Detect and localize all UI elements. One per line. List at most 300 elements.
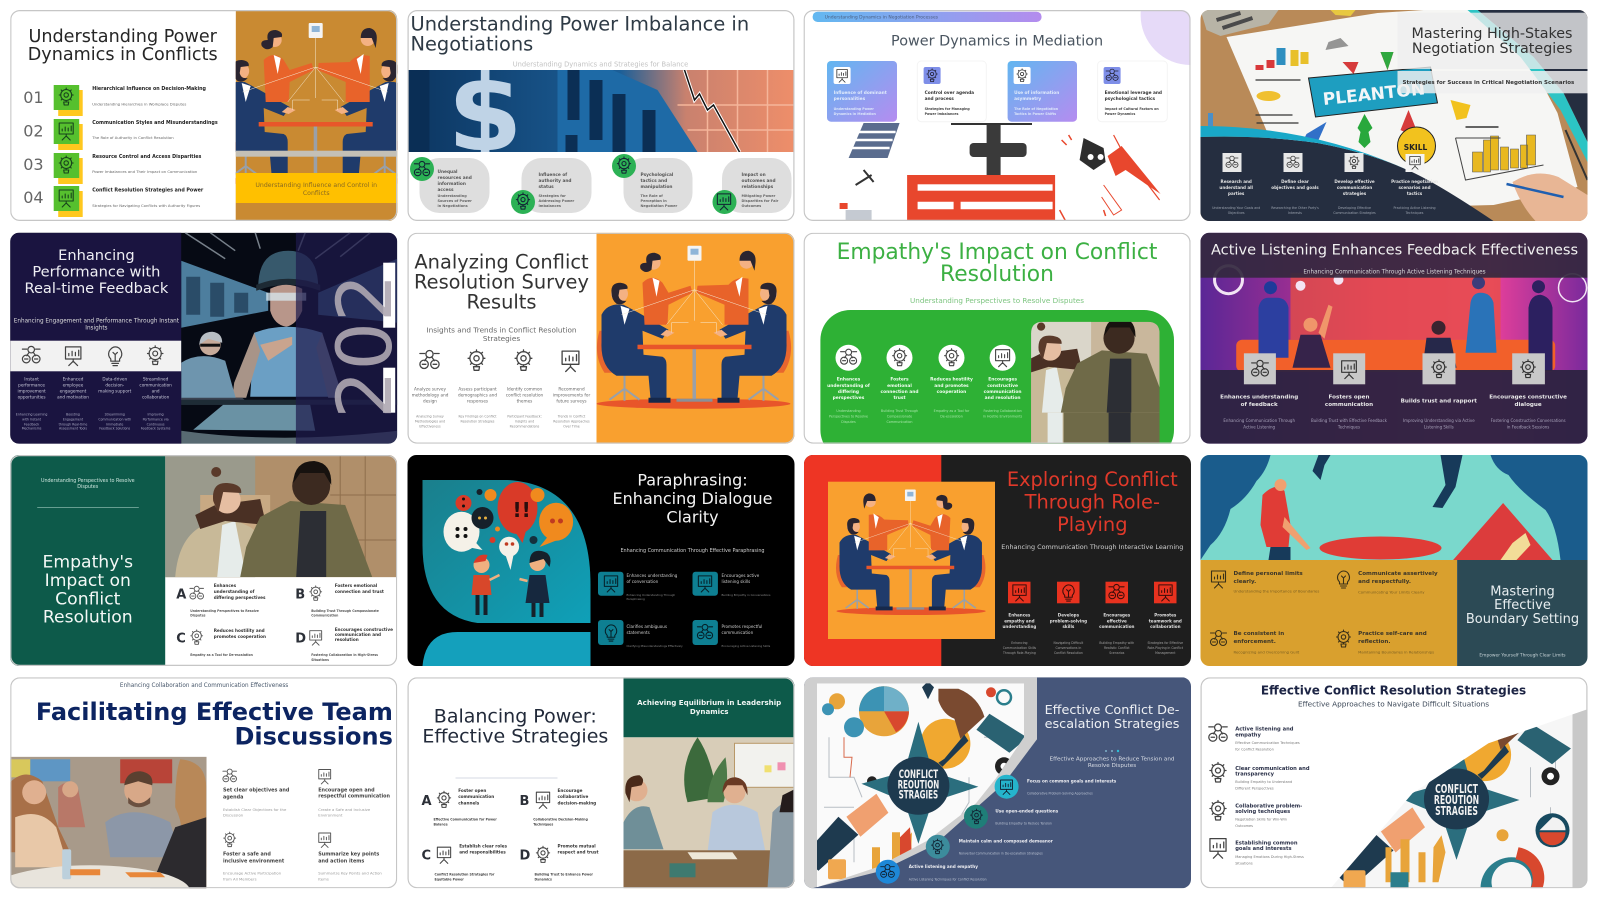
grid: four tips: listening skills <box>722 579 750 584</box>
text: benefits columns: Performance via <box>143 418 169 422</box>
header text: Achieving Equilibrium in Leadership <box>637 698 781 707</box>
text: survey columns: Assess participant <box>458 387 497 392</box>
grid: four tips: communication <box>722 630 754 635</box>
cards: four factors <box>410 154 792 214</box>
text: benefits columns: Encourages <box>988 377 1017 383</box>
illustration: camera on red stand <box>840 123 1161 221</box>
list: four strategies: Building Empathy to Understand <box>1235 780 1292 784</box>
subtitle: Insights <box>85 326 108 332</box>
list: numbered topics: Power Imbalances and Their Impact on Communication <box>92 169 198 174</box>
grid: A B C D: Empathy as a Tool for De-escalation <box>190 653 253 657</box>
grid: four tips: enforcement. <box>1234 639 1276 645</box>
panel: strategies on dark curve: Techniques <box>1405 211 1424 215</box>
cards: four dynamics: Impact of Cultural Factors on <box>1105 107 1159 111</box>
cards: four dynamics: and process <box>925 96 954 102</box>
compass label: STRAGIES <box>899 789 938 802</box>
text: benefits columns: opportunities <box>18 395 46 400</box>
illustration: conflict compass <box>802 681 1027 888</box>
decorative circle <box>1140 10 1190 65</box>
icons: red squares <box>1008 582 1176 603</box>
cards: four factors: manipulation <box>640 184 672 190</box>
panel: strategies on dark curve: Objectives <box>1228 211 1245 215</box>
grid: A B C D: Dynamics <box>534 877 552 881</box>
grid: A B C D: Situations <box>311 658 329 662</box>
cards: four dynamics: Understanding Power <box>834 107 874 111</box>
cards: four dynamics: Power Imbalances <box>925 112 958 116</box>
text: benefits columns: Compassionate <box>887 415 912 419</box>
text: benefits columns: and resolution <box>985 395 1021 401</box>
panel: green background <box>820 310 1174 460</box>
slide: Facilitating Effective Team Discussions <box>0 677 397 900</box>
cards: four dynamics: Tactics in Power Shifts <box>1014 112 1056 116</box>
grid: A B C D <box>422 788 598 881</box>
title: Through Role- <box>1024 490 1160 514</box>
panel: title band <box>1200 233 1588 278</box>
text: four outcomes: Management <box>1155 651 1176 655</box>
text: benefits columns: Feedback Solutions <box>99 427 131 431</box>
list: numbered topics: Hierarchical Influence on Decision-Making <box>92 86 207 92</box>
text: benefits columns: and promotes <box>934 383 969 389</box>
image: planning sketch on desk: SKILL <box>1404 143 1428 152</box>
text: benefits columns: differing <box>838 389 859 395</box>
text: four benefits: Fosters open <box>1329 395 1369 401</box>
image: helmet and control console <box>181 233 397 444</box>
text: benefits columns: Fosters <box>890 377 909 383</box>
title: Negotiations <box>410 32 533 56</box>
list: four strategies: Establishing common <box>1235 840 1298 846</box>
list: four strategies: Managing Emotions During High-Stress <box>1235 855 1304 859</box>
grid: four tips: Items <box>318 876 329 881</box>
text: four benefits: of feedback <box>1241 402 1278 408</box>
text: survey columns: improvements for <box>553 393 590 398</box>
text: four benefits: Listening Skills <box>1424 425 1454 430</box>
cards: four dynamics: asymmetry <box>1014 96 1041 102</box>
title: Active Listening Enhances Feedback Effectiveness <box>1211 242 1578 259</box>
grid: A B C D: Enhances <box>214 583 237 588</box>
cards: four factors: Negotiation Power <box>640 204 678 208</box>
panel: title background <box>1398 13 1588 93</box>
slide: Paraphrasing: Enhancing Dialogue Clarity <box>408 455 794 666</box>
grid: four tips: and action items <box>318 858 364 864</box>
list: four approaches: Focus on common goals and interests <box>1027 778 1117 783</box>
cards: four factors: Sources of Power <box>438 199 472 203</box>
text: survey columns: Identify common <box>507 387 543 392</box>
list: numbered topics: Understanding Hierarchies in Workplace Disputes <box>92 102 186 106</box>
image: boundary scene <box>1200 455 1588 560</box>
grid: A B C D: and responsibilities <box>459 850 506 855</box>
title: Understanding Power <box>28 27 218 47</box>
panel: strategies on dark curve: Define clear <box>1281 179 1309 184</box>
image: dollar and building <box>408 70 794 152</box>
cards: four factors: tactics and <box>640 178 667 184</box>
cards: four factors: Strategies for <box>538 194 566 198</box>
grid: A B C D: B <box>520 794 529 809</box>
illustration: speech bubbles and two children: !! <box>512 498 531 522</box>
subtitle: Understanding Dynamics and Strategies for Balance <box>513 60 688 68</box>
slide: Empathy's Impact on Conflict Resolution, green panel <box>804 233 1191 460</box>
text: survey columns: Analyze survey <box>414 387 446 392</box>
title: Real-time Feedback <box>24 280 169 297</box>
list: four approaches: Use open-ended questions <box>995 808 1059 813</box>
cards: four factors: Psychological <box>640 172 674 178</box>
title: Resolution Survey <box>414 271 589 294</box>
grid: A B C D: Effective Communication for Power <box>434 817 497 821</box>
text: benefits columns: Enhancing Learning <box>16 413 47 417</box>
text: benefits columns: Improving <box>148 413 164 417</box>
text: four outcomes: Role-Playing in Conflict <box>1148 646 1184 650</box>
slide: Balancing Power: Effective Strategies <box>408 677 794 888</box>
text: four outcomes: Promotes <box>1154 612 1177 618</box>
title: Effective Strategies <box>422 725 608 747</box>
text: four outcomes: Enhancing <box>1011 641 1028 645</box>
grid: four tips: Enhancing Understanding Through <box>626 593 675 597</box>
cards: four dynamics: The Role of Negotiation <box>1014 107 1059 111</box>
panel: strategies on dark curve: Practicing Active Listening <box>1393 206 1436 210</box>
text: four benefits: Techniques <box>1337 425 1360 430</box>
text: four benefits: Builds trust and rapport <box>1401 399 1477 405</box>
panel: strategies on dark curve: Researching the Other Party's <box>1271 206 1319 210</box>
text: four outcomes: Navigating Difficult <box>1054 641 1084 645</box>
text: four outcomes: problem-solving <box>1050 618 1087 623</box>
tagline: Understanding Perspectives to Resolve <box>41 478 135 484</box>
text: four benefits: Active Listening <box>1243 425 1276 430</box>
panel: icon band <box>10 341 181 371</box>
text: benefits columns: Fostering Collaboration <box>983 409 1022 413</box>
panel: meeting illustration: Understanding Influence and Control in <box>255 182 377 189</box>
text: benefits columns: making support <box>98 389 132 394</box>
text: benefits columns: Perspectives to Resolve <box>829 415 868 419</box>
grid: A B C D: Communication <box>311 614 338 618</box>
text: benefits columns: collaboration <box>142 395 170 400</box>
grid: A B C D: A <box>176 588 186 602</box>
grid: A B C D: Conflict Resolution Strategies for <box>434 872 495 876</box>
grid: A B C D: C <box>176 632 186 646</box>
text: benefits columns: Building Trust Through <box>881 409 918 413</box>
grid: A B C D: differing perspectives <box>214 595 266 600</box>
text: four benefits <box>1220 395 1567 430</box>
grid: four tips: Maintaining Boundaries in Relationships <box>1358 650 1434 654</box>
decoration: white bars and rotated year <box>334 262 396 414</box>
panel: meeting illustration <box>236 10 398 221</box>
list: four strategies: Situations <box>1235 861 1253 865</box>
cards: four factors: Outcomes <box>742 204 761 208</box>
image: people on a sofa <box>1200 233 1588 444</box>
title: Power Dynamics in Mediation <box>891 34 1103 50</box>
grid: four tips: Establish Clear Objectives for the <box>223 807 287 812</box>
text: benefits columns <box>827 377 1022 424</box>
icons: white circles <box>836 345 1016 371</box>
title: Empathy's <box>43 552 133 572</box>
panel: meeting illustration <box>596 233 794 444</box>
text: survey columns: Insights and <box>515 420 534 424</box>
title: Effective Conflict Resolution Strategies <box>1261 683 1526 697</box>
panel: yellow tips <box>1200 560 1457 666</box>
shape: lower teal panel <box>422 632 590 666</box>
photo: two people <box>165 455 397 577</box>
text: benefits columns: Continuous <box>147 423 165 427</box>
cards: four factors: Disparities for Fair <box>742 199 779 203</box>
list: four strategies: Different Perspectives <box>1235 786 1274 790</box>
text: benefits columns: Communication with <box>98 418 131 422</box>
text: survey columns <box>412 387 590 429</box>
header pill: Understanding Dynamics in Negotiation Processes <box>825 14 939 20</box>
slide: Understanding Power Dynamics in Conflicts <box>10 10 412 221</box>
grid: four tips: from All Members <box>223 876 257 881</box>
list: four approaches: Maintain calm and composed demeanor <box>959 838 1054 843</box>
text: benefits columns: Streamlined <box>143 377 169 382</box>
title: Empathy's Impact on Conflict <box>837 240 1158 265</box>
title: Dynamics in Conflicts <box>28 45 218 65</box>
compass label: CONFLICT <box>1435 782 1479 796</box>
panel: strategies on dark curve: understand all <box>1219 185 1254 190</box>
grid: A B C D: Encourages constructive <box>335 627 393 632</box>
list: four approaches: Collaborative Problem-Solving Approaches <box>1027 791 1093 795</box>
text: survey columns: Trends in Conflict <box>557 415 586 419</box>
text: four outcomes: Building Empathy with <box>1099 641 1134 645</box>
grid: A B C D: Promote mutual <box>558 843 596 848</box>
panel: meeting illustration: Conflicts <box>303 190 330 197</box>
title: Impact on <box>45 571 131 591</box>
text: four outcomes: Conflict Resolution <box>1054 651 1083 655</box>
text: benefits columns: De-escalation <box>940 415 963 419</box>
grid: four tips: Create a Safe and Inclusive <box>318 807 371 812</box>
cards: four factors: information <box>438 181 466 187</box>
list: four approaches: Active listening and empathy <box>909 864 978 869</box>
image: planning sketch on desk <box>1200 5 1588 221</box>
text: four outcomes: understanding <box>1002 624 1036 629</box>
text: benefits columns: Assessment Tools <box>59 427 87 431</box>
list: four strategies: Clear communication and <box>1235 766 1310 772</box>
grid: A B C D: promotes cooperation <box>214 634 266 639</box>
text: survey columns: Analyzing Survey <box>416 415 444 419</box>
text: benefits columns: Enhanced <box>63 377 84 382</box>
text: benefits columns: Communication <box>886 420 912 424</box>
subtitle: Effective Approaches to Reduce Tension and <box>1050 756 1175 762</box>
slide: Effective Conflict Resolution Strategies <box>1200 677 1588 888</box>
text: benefits columns: and <box>152 389 160 394</box>
list: four strategies <box>1209 724 1310 865</box>
list: four strategies: goals and interests <box>1235 846 1292 852</box>
text: survey columns: conflict resolution <box>506 393 544 398</box>
text: four outcomes: skills <box>1062 624 1075 629</box>
grid: four tips: Environment <box>318 812 343 817</box>
grid: A B C D: D <box>295 632 306 646</box>
list: numbered topics <box>23 85 218 217</box>
panel: lower band <box>1200 370 1588 444</box>
text: survey columns: Resolution Approaches <box>553 420 590 424</box>
grid: four tips: Practice self-care and <box>1358 631 1427 637</box>
cards: four dynamics: psychological tactics <box>1105 96 1156 102</box>
compass label: REOUTION <box>1434 793 1479 807</box>
list: four approaches: Active Listening Techniques for Conflict Resolution <box>909 877 987 881</box>
text: benefits columns: employee <box>63 383 84 388</box>
panel: strategies on dark curve: strategies <box>1343 191 1367 196</box>
list: four strategies: transparency <box>1235 771 1275 777</box>
cards: four factors: Addressing Power <box>538 199 574 203</box>
text: four benefits: communication <box>1325 402 1373 408</box>
slide: Empathy's Impact on Conflict Resolution, photo top <box>10 455 397 666</box>
cards: four dynamics: Emotional leverage and <box>1105 90 1162 96</box>
text: four outcomes: Through Role-Playing <box>1002 651 1036 655</box>
panel: strategies on dark curve <box>1200 126 1494 221</box>
grid: four tips: Promotes respectful <box>722 624 762 629</box>
text: four outcomes: Develops <box>1058 612 1080 618</box>
grid: A B C D: Reduces hostility and <box>214 628 265 633</box>
list: numbered topics: Strategies for Navigating Conflicts with Authority Figures <box>92 203 200 208</box>
cards: four factors: Influence of <box>538 172 567 178</box>
text: survey columns: Resolution Strategies <box>461 420 495 424</box>
text: four benefits: in Feedback Sessions <box>1507 425 1549 430</box>
text: survey columns: methodology and <box>412 393 449 398</box>
grid: four tips: Foster a safe and <box>223 851 271 857</box>
text: four outcomes: Enhances <box>1008 612 1031 618</box>
grid: four tips <box>1210 571 1438 654</box>
title: Mastering High-Stakes <box>1412 26 1572 42</box>
text: four benefits: Enhances understanding <box>1220 395 1298 401</box>
cards: four dynamics: Power Dynamics <box>1105 112 1135 116</box>
text: benefits columns: Enhances <box>837 377 861 383</box>
text: benefits columns: decision- <box>105 383 125 388</box>
text: benefits columns: connection and <box>881 389 918 395</box>
cards: four factors: relationships <box>742 184 774 190</box>
grid: four tips: Communicate assertively <box>1358 571 1438 577</box>
cards: four dynamics: Control over agenda <box>925 90 974 96</box>
grid: four tips: Building Empathy in Conversations <box>722 593 771 597</box>
text: benefits columns: understanding of <box>827 383 870 389</box>
panel: strategies on dark curve: parties <box>1228 191 1245 196</box>
shape: grey frame <box>804 677 1037 890</box>
image: dollar and building: $ <box>448 51 523 176</box>
cards: four factors: outcomes and <box>742 178 776 184</box>
illustration: conflict compass <box>1200 677 1588 888</box>
list: numbered topics: Communication Styles and Misunderstandings <box>92 120 218 126</box>
title: Clarity <box>666 508 719 526</box>
text: survey columns: Methodologies and <box>415 420 445 424</box>
text: benefits columns: Disputes <box>841 420 856 424</box>
text: benefits columns: perspectives <box>833 395 865 401</box>
slide: Exploring Conflict Through Role-Playing <box>804 455 1191 666</box>
cards: four factors: Mitigating Power <box>742 194 776 198</box>
subtitle: Enhancing Collaboration and Communication Effectiveness <box>120 683 288 689</box>
cards: four factors: Understanding <box>438 194 467 198</box>
title: Effective Conflict De- <box>1045 703 1179 718</box>
title: Playing <box>1057 513 1128 536</box>
panel: strategies on dark curve: Interests <box>1288 211 1302 215</box>
grid: A B C D: Balance <box>434 822 448 826</box>
illustration: speech bubbles and two children <box>444 482 573 617</box>
slide: Power Dynamics in Mediation <box>804 10 1191 221</box>
text: four benefits: dialogue <box>1514 402 1542 408</box>
title: escalation Strategies <box>1045 717 1180 732</box>
panel: red side <box>804 455 941 666</box>
divider <box>456 777 558 779</box>
panel: meeting illustration <box>828 482 995 639</box>
grid: four tips: agenda <box>223 794 243 800</box>
list: numbered topics: 02 <box>23 122 44 140</box>
title: Conflict <box>55 589 121 609</box>
text: benefits columns: trust <box>893 395 906 401</box>
text: benefits columns: Boosting <box>66 413 80 417</box>
list: four strategies: Negotiation Skills for Win-Win <box>1235 817 1287 821</box>
grid: A B C D: Equitable Power <box>434 877 464 881</box>
title: Enhancing <box>58 247 135 264</box>
text: survey columns: themes <box>517 399 532 404</box>
grid: A B C D: Techniques <box>533 822 553 826</box>
cards: four factors: Unequal <box>438 169 458 175</box>
cards: four dynamics: Influence of dominant <box>834 90 887 96</box>
list: four approaches <box>876 775 1117 884</box>
list: four strategies: Outcomes <box>1235 824 1253 828</box>
text: survey columns: Effectiveness <box>419 425 441 429</box>
grid: A B C D: communication <box>458 794 494 799</box>
subtitle: Enhancing Communication Through Effective Paraphrasing <box>620 548 765 554</box>
grid: four tips: Set clear objectives and <box>223 787 290 793</box>
grid: four tips: of conversation <box>626 579 659 584</box>
grid: four tips: Paraphrasing <box>626 597 645 601</box>
text: four outcomes: Strategies for Effective <box>1148 641 1183 645</box>
grid: A B C D: Establish clear roles <box>459 843 508 848</box>
text: benefits columns: Reduces hostility <box>930 377 973 383</box>
title: Performance with <box>32 264 160 281</box>
text: survey columns: responses <box>467 399 488 404</box>
title: Enhancing Dialogue <box>613 489 772 508</box>
grid: A B C D: communication and <box>335 632 381 637</box>
text: four outcomes: empathy and <box>1004 618 1035 623</box>
text: benefits columns: constructive <box>987 383 1018 389</box>
list: four strategies: empathy <box>1235 732 1262 738</box>
grid: four tips: Understanding the Importance of Boundaries <box>1234 588 1319 594</box>
title: Effective <box>1494 598 1551 613</box>
text: benefits columns: communication <box>984 389 1022 395</box>
grid: A B C D: Encourage <box>558 788 583 793</box>
grid: A B C D: channels <box>458 800 480 805</box>
shape: navy corner <box>1478 10 1588 142</box>
text: benefits columns: Feedback <box>24 423 39 427</box>
panel: strategies on dark curve: Understanding Your Goals and <box>1212 206 1260 210</box>
subtitle: Empower Yourself Through Clear Limits <box>1479 652 1566 658</box>
text: four outcomes: Encourages <box>1103 612 1131 618</box>
list: four strategies: for Conflict Resolution <box>1235 747 1274 751</box>
grid: A B C D: Fostering Collaboration in High-Stress <box>311 653 378 657</box>
list: numbered topics: 01 <box>23 88 44 107</box>
text: four benefits: Fostering Constructive Conversations <box>1491 418 1566 423</box>
title: Balancing Power: <box>434 705 597 727</box>
title: Boundary Setting <box>1466 612 1579 627</box>
text: four outcomes: collaboration <box>1150 624 1181 629</box>
text: four outcomes: Realistic Conflict <box>1104 646 1130 650</box>
divider <box>37 506 139 508</box>
title: Resolution <box>940 262 1054 287</box>
cards: four factors: Impact on <box>742 172 766 178</box>
text: four benefits: Improving Understanding via Active <box>1403 418 1475 423</box>
text: benefits columns: Instant <box>24 377 39 382</box>
cards: four factors: The Role of <box>640 194 663 198</box>
title: Exploring Conflict <box>1007 468 1178 491</box>
grid: A B C D: resolution <box>335 637 359 642</box>
text: benefits columns: cooperation <box>937 389 966 395</box>
slide: Effective Conflict De-escalation Strategies <box>802 677 1191 890</box>
text: four benefits: Enhancing Communication Through <box>1223 418 1295 423</box>
grid: A B C D: A <box>422 794 432 809</box>
title: Facilitating Effective Team <box>36 698 393 726</box>
cards: four dynamics: Strategies for Managing <box>925 107 970 111</box>
text: benefits columns: Mechanisms <box>22 427 42 431</box>
header pill <box>813 12 1042 22</box>
grid: four tips: respectful communication <box>318 793 391 799</box>
grid: A B C D: Building Trust to Enhance Power <box>534 872 593 876</box>
grid: four tips: inclusive environment <box>223 858 285 864</box>
tagline: Disputes <box>77 484 99 490</box>
